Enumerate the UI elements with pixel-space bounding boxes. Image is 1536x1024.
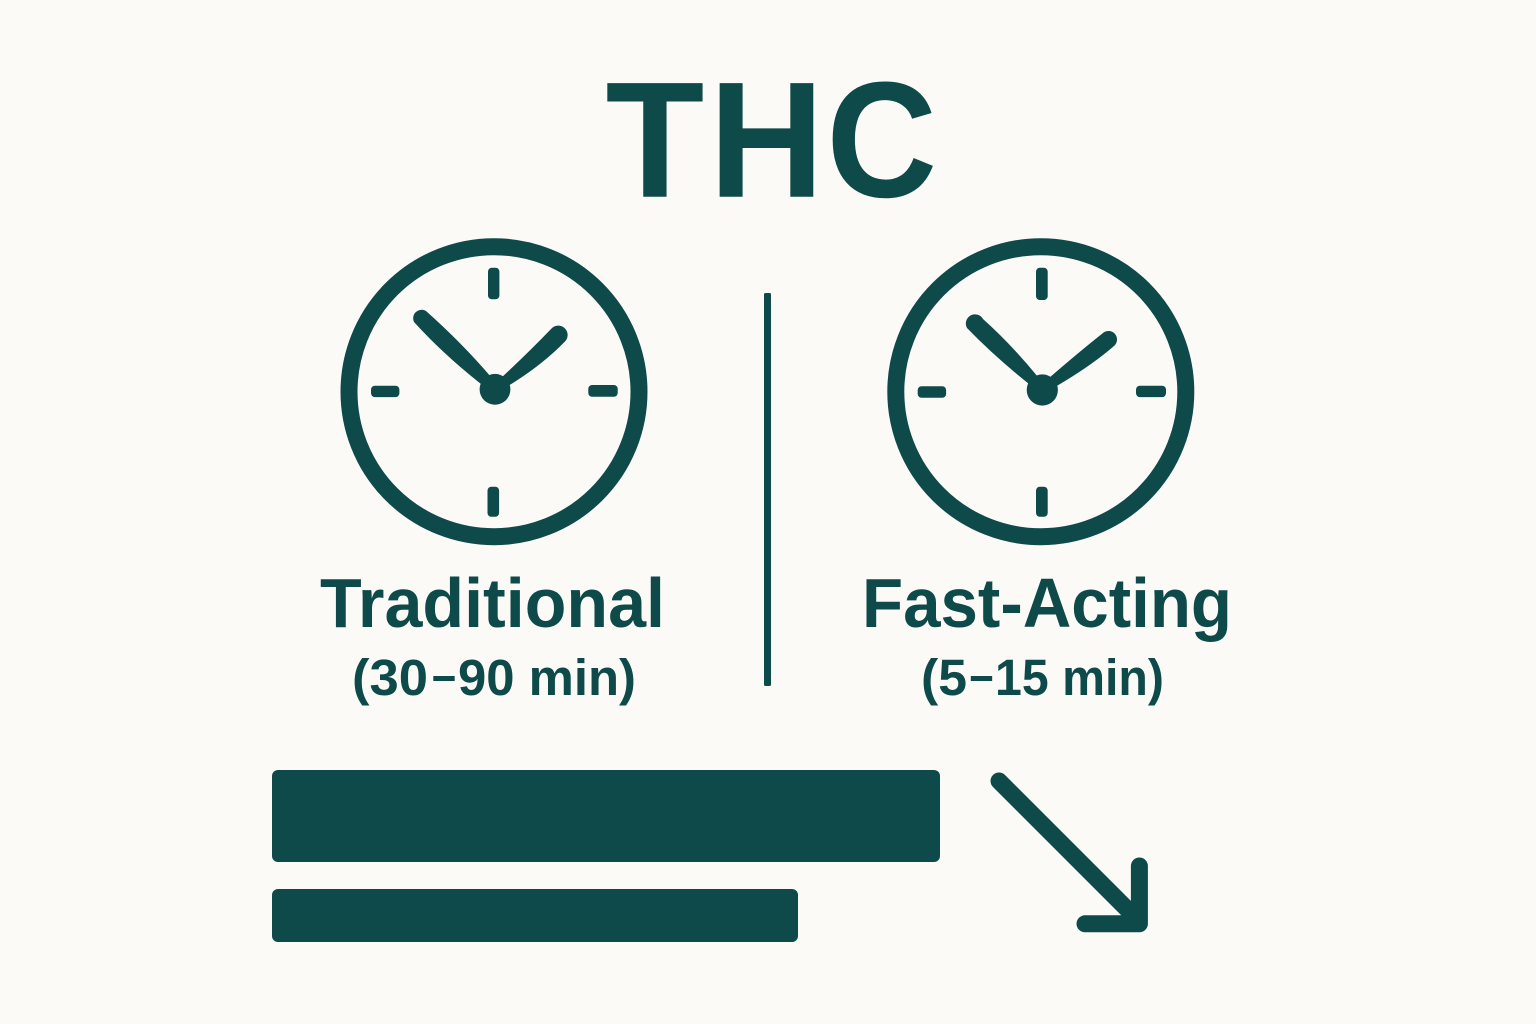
icon: traditional clock [349, 247, 639, 537]
title: H [709, 48, 824, 232]
label: fast-acting time [921, 646, 1164, 706]
label: traditional time: – [432, 646, 456, 703]
icon: fast-acting clock [896, 247, 1186, 537]
label: traditional: Traditional [320, 564, 665, 642]
title: T [606, 48, 704, 232]
label: traditional time: (30 [352, 649, 428, 706]
label: traditional time [352, 646, 636, 706]
arrow: decreasing time [999, 781, 1139, 924]
bar: traditional [272, 770, 940, 862]
label: fast-acting time: – [970, 646, 994, 703]
label: traditional time: 90 min) [458, 649, 636, 706]
bar: fast-acting [272, 889, 798, 942]
label: fast-acting time: (5 [921, 649, 967, 706]
title: C [826, 48, 937, 232]
label: fast-acting: Fast-Acting [862, 564, 1232, 642]
divider line [764, 293, 771, 686]
label: fast-acting time: 15 min) [995, 649, 1164, 706]
title [606, 48, 937, 232]
